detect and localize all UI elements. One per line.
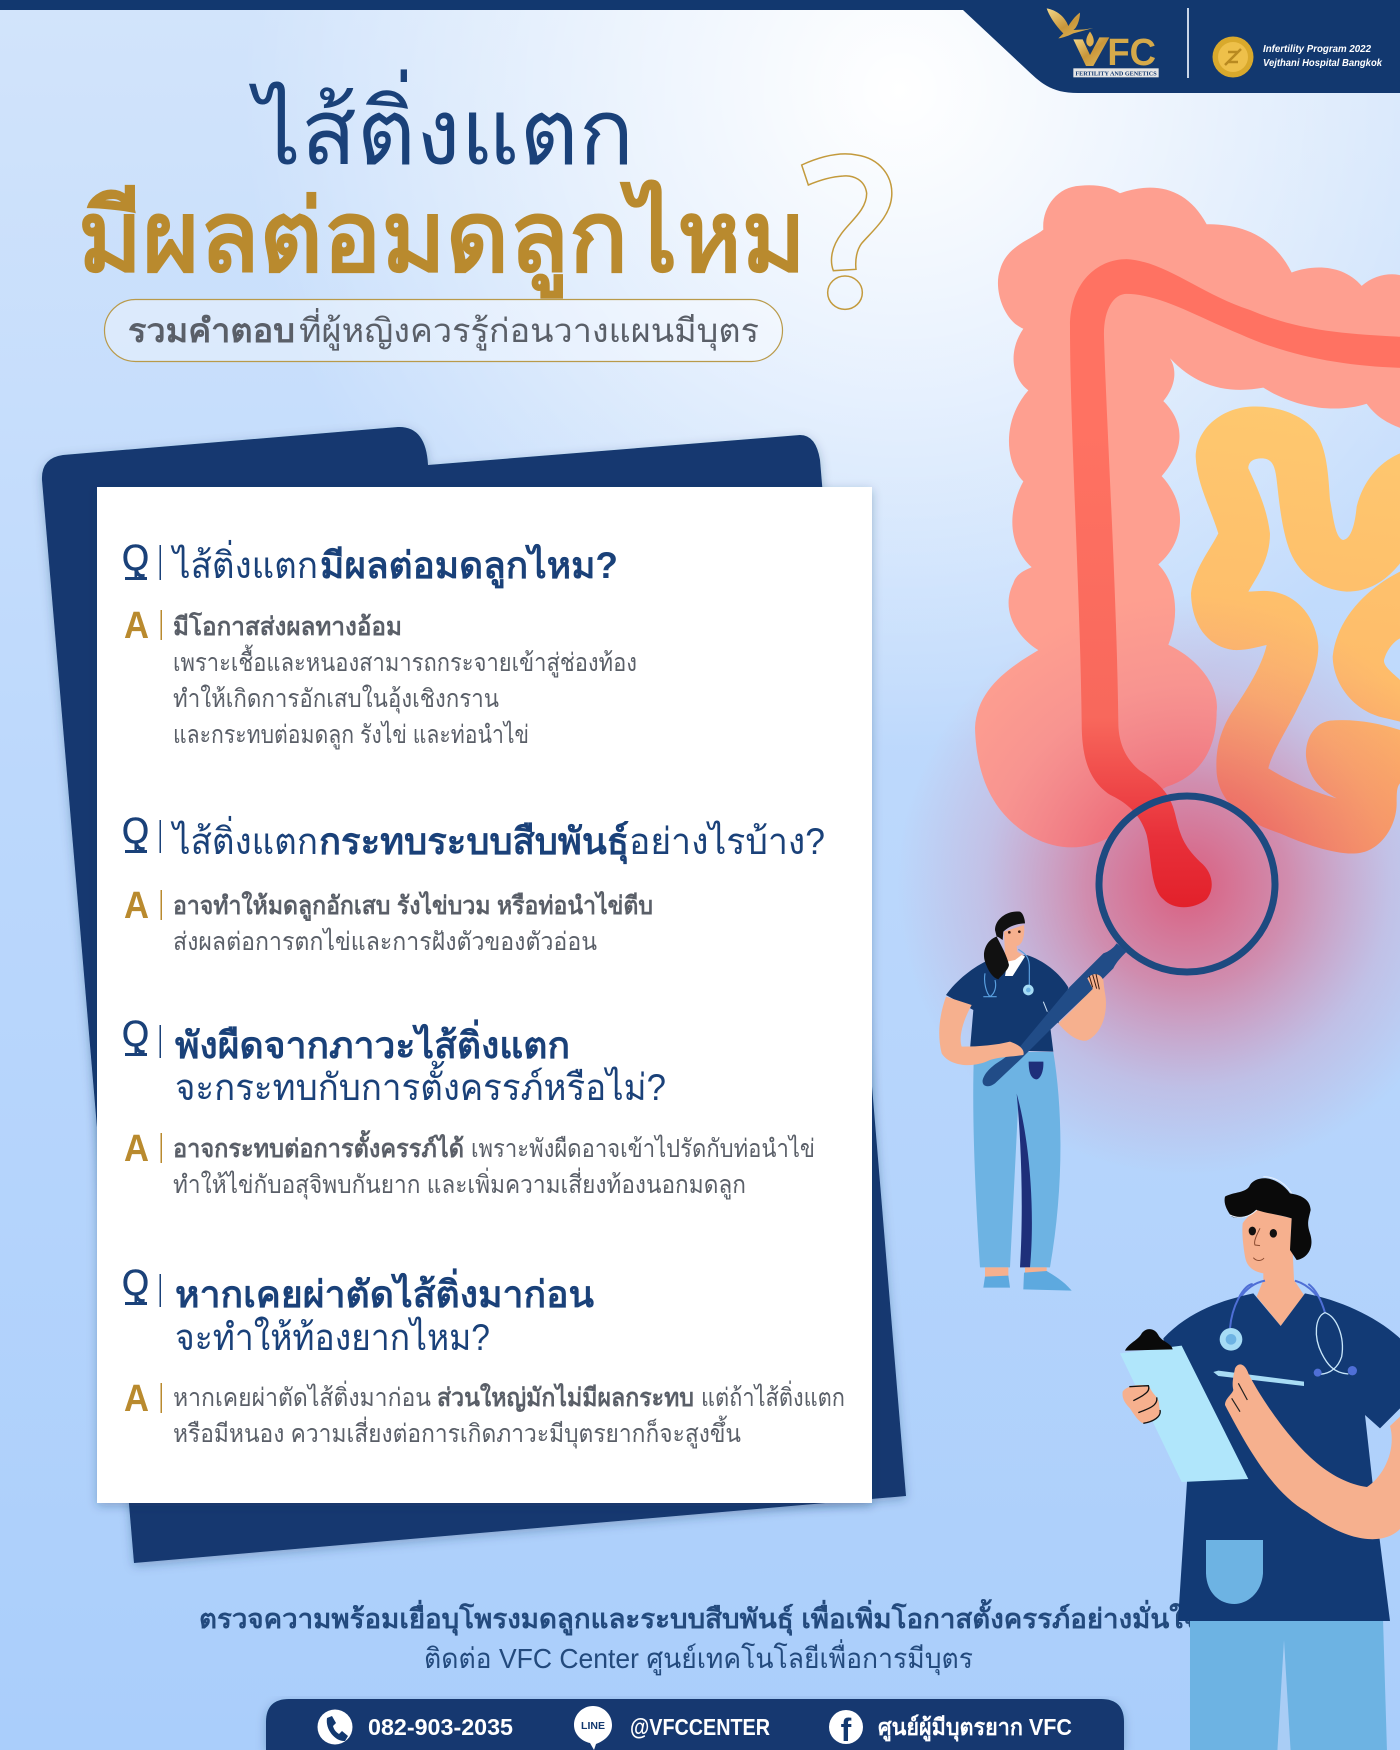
- question 1: ไส้ติ่งแตก: [170, 539, 318, 586]
- panel: Q&A card: [97, 487, 872, 1503]
- answer 4: A: [124, 1378, 149, 1420]
- phone number: 082-903-2035: [368, 1714, 513, 1740]
- header bar with logos: [0, 0, 1400, 93]
- illustration: colon inner stripe and appendix: [1070, 259, 1400, 907]
- illustration: male doctor with clipboard: [1120, 1177, 1400, 1750]
- question 3: Q: [122, 1013, 149, 1054]
- question 3: [122, 1013, 666, 1108]
- answer 1: ทำให้เกิดการอักเสบในอุ้งเชิงกราน: [173, 684, 499, 714]
- closing message: ติดต่อ VFC Center ศูนย์เทคโนโลยีเพื่อการมีบุตร: [424, 1639, 973, 1676]
- icon: Facebook: f: [841, 1712, 852, 1748]
- title: มีผลต่อมดลูกไหม: [78, 180, 806, 299]
- pocket: [1206, 1540, 1263, 1604]
- illustration: colon: [975, 185, 1400, 847]
- stethoscope front: [1220, 1284, 1357, 1377]
- question 3: จะกระทบกับการตั้งครรภ์หรือไม่?: [175, 1060, 666, 1108]
- LINE handle: @VFCCENTER: [630, 1714, 770, 1740]
- left arm and hand: [939, 997, 1024, 1065]
- question 1: มีผลต่อมดลูกไหม?: [320, 543, 618, 589]
- icon: VFC logo: FERTILITY AND GENETICS: [1075, 70, 1157, 77]
- stethoscope tube behind neck: [1230, 1281, 1325, 1328]
- icon: VFC logo: [1047, 8, 1159, 77]
- magnifier handle: [983, 943, 1127, 1086]
- answer 2: ส่งผลต่อการตกไข่และการฝังตัวของตัวอ่อน: [173, 927, 597, 956]
- answer 1: มีโอกาสส่งผลทางอ้อม: [173, 611, 402, 641]
- hair: [1225, 1178, 1311, 1260]
- answer 1: เพราะเชื้อและหนองสามารถกระจายเข้าสู่ช่องท้อง: [173, 644, 637, 678]
- pants: [1190, 1618, 1387, 1750]
- answer 4: [124, 1378, 845, 1449]
- answer 3: ทำให้ไข่กับอสุจิพบกันยาก และเพิ่มความเสี่ยงท้องนอกมดลูก: [173, 1167, 746, 1200]
- answer 2: [124, 885, 653, 956]
- accreditation text: [1263, 43, 1383, 69]
- question 1: Q: [122, 537, 149, 578]
- illustration: small intestine: [1191, 406, 1400, 854]
- answer 4: หากเคยผ่าตัดไส้ติ่งมาก่อน: [173, 1380, 431, 1412]
- neck and face: [1242, 1210, 1304, 1326]
- question 1: [122, 537, 618, 589]
- accreditation text: Infertility Program 2022: [1263, 43, 1371, 55]
- answer 3: อาจกระทบต่อการตั้งครรภ์ได้: [173, 1129, 464, 1163]
- contact bar: [266, 1699, 1124, 1750]
- answer 2: A: [124, 885, 149, 927]
- question 2: ไส้ติ่งแตก: [170, 815, 318, 862]
- title: ไส้ติ่งแตก: [248, 69, 634, 184]
- subtitle pill: รวมคำตอบ: [128, 312, 295, 349]
- stethoscope: [983, 949, 1029, 997]
- accreditation text: Vejthani Hospital Bangkok: [1263, 57, 1383, 69]
- icon: question mark outline: [802, 154, 892, 309]
- question 2: อย่างไรบ้าง?: [629, 820, 825, 862]
- subtitle pill: [104, 300, 782, 362]
- question 4: หากเคยผ่าตัดไส้ติ่งมาก่อน: [175, 1268, 594, 1315]
- answer 2: อาจทำให้มดลูกอักเสบ รังไข่บวม หรือท่อนำไข่ตีบ: [173, 890, 653, 922]
- closing message: [199, 1598, 1199, 1676]
- question 2: [122, 810, 825, 865]
- icon: Facebook: [829, 1710, 863, 1748]
- question 2: กระทบระบบสืบพันธุ์: [319, 821, 629, 865]
- pants: [973, 1052, 1060, 1267]
- illustration: female doctor with magnifier: [939, 911, 1127, 1291]
- ankles and shoes: [985, 1267, 1047, 1277]
- scrub top: [1163, 1293, 1400, 1621]
- head: [1004, 925, 1025, 975]
- writing arm: [1225, 1364, 1400, 1539]
- title: [78, 69, 806, 299]
- answer 3: A: [124, 1128, 149, 1170]
- icon: phone: [318, 1710, 352, 1744]
- right arm: [1058, 976, 1106, 1041]
- icon: LINE: LINE: [581, 1720, 605, 1732]
- pen: [1213, 1371, 1304, 1386]
- question 4: จะทำให้ท้องยากไหม?: [175, 1316, 490, 1358]
- question 3: พังผืดจากภาวะไส้ติ่งแตก: [175, 1019, 570, 1066]
- Facebook page: ศูนย์ผู้มีบุตรยาก VFC: [878, 1714, 1072, 1742]
- answer 1: และกระทบต่อมดลูก รังไข่ และท่อนำไข่: [173, 720, 529, 750]
- question 4: [122, 1262, 594, 1358]
- question 4: Q: [122, 1262, 149, 1303]
- icon: gold medal: [1212, 36, 1254, 78]
- holding hand: [1122, 1385, 1160, 1423]
- answer 4: หรือมีหนอง ความเสี่ยงต่อการเกิดภาวะมีบุตรยากก็จะสูงขึ้น: [173, 1415, 741, 1449]
- panel: dark folder backing: [42, 427, 906, 1563]
- answer 1: [124, 605, 637, 750]
- icon: LINE: [574, 1706, 612, 1750]
- answer 3: [124, 1128, 815, 1200]
- illustration: magnifier ring: [1099, 796, 1275, 972]
- facial features: [1249, 1227, 1277, 1260]
- answer 1: A: [124, 605, 149, 647]
- closing message: ตรวจความพร้อมเยื่อบุโพรงมดลูกและระบบสืบพันธุ์ เพื่อเพิ่มโอกาสตั้งครรภ์อย่างมั่นใจ: [199, 1598, 1199, 1636]
- answer 3: เพราะพังผืดอาจเข้าไปรัดกับท่อนำไข่: [471, 1134, 815, 1163]
- answer 4: แต่ถ้าไส้ติ่งแตก: [701, 1380, 845, 1412]
- shirt: [946, 955, 1068, 1052]
- question 2: Q: [122, 810, 149, 851]
- clipboard: [1120, 1346, 1248, 1482]
- illustration: inflammation glow: [897, 595, 1400, 1175]
- fingers on handle: [1087, 974, 1105, 997]
- subtitle pill: ที่ผู้หญิงควรรู้ก่อนวางแผนมีบุตร: [299, 308, 759, 351]
- answer 4: ส่วนใหญ่มักไม่มีผลกระทบ: [437, 1382, 694, 1412]
- icon: VFC logo: FC: [1107, 32, 1156, 74]
